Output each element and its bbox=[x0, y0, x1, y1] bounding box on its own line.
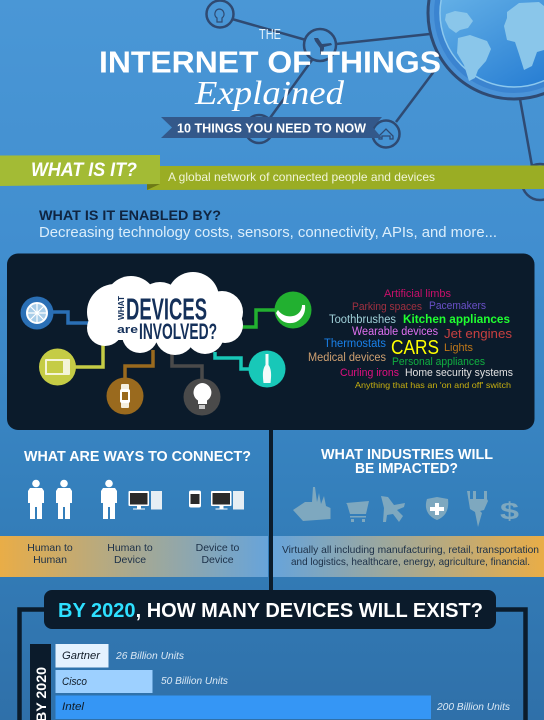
chart heading: BY 2020, HOW MANY DEVICES WILL EXIST? bbox=[58, 600, 483, 622]
icon: light bulb bbox=[184, 378, 220, 416]
icon: toothbrush bbox=[248, 350, 286, 388]
title bbox=[99, 26, 441, 112]
industries heading: BE IMPACTED? bbox=[355, 461, 458, 477]
cloud heading: involved: INVOLVED? bbox=[139, 319, 217, 344]
bar chart bbox=[30, 644, 510, 720]
globe continents bbox=[445, 2, 544, 81]
subtitle ribbon bbox=[161, 117, 382, 138]
word cloud: Jet engines bbox=[444, 326, 513, 341]
panel: by 2020 chart bbox=[20, 590, 526, 720]
band heading: WHAT IS IT? bbox=[31, 159, 137, 181]
axis label bbox=[30, 644, 51, 720]
connect labels: Device bbox=[201, 554, 234, 566]
connect heading: WHAT ARE WAYS TO CONNECT? bbox=[24, 449, 251, 465]
device connectors bbox=[53, 310, 276, 379]
word cloud: Kitchen appliances bbox=[403, 312, 510, 326]
center stem connector bbox=[269, 430, 273, 592]
panel: devices bbox=[7, 254, 534, 430]
title line: Explained: Explained bbox=[194, 75, 345, 112]
icon: shield bbox=[426, 497, 448, 520]
enabled by text: Decreasing technology costs, sensors, connectivity, APIs, and more... bbox=[39, 224, 497, 241]
title line: Internet of Things: INTERNET OF THINGS bbox=[99, 46, 441, 80]
word cloud: Curling irons bbox=[340, 367, 399, 379]
word cloud: Personal appliances bbox=[392, 356, 485, 368]
industry icons bbox=[293, 487, 520, 527]
bar: Gartner: Gartner bbox=[62, 650, 101, 662]
icon: house bbox=[379, 129, 393, 139]
bar: Cisco: 50 Billion Units bbox=[161, 676, 228, 687]
icon: shopping cart bbox=[346, 501, 369, 522]
connect labels: Human bbox=[33, 554, 67, 566]
what is it band bbox=[0, 155, 544, 190]
connect band bbox=[0, 536, 268, 577]
word cloud: Pacemakers bbox=[429, 300, 486, 312]
icon: plane bbox=[314, 38, 332, 55]
network illustration bbox=[206, 0, 544, 200]
icon: fitness band bbox=[274, 292, 312, 328]
icons: human to device bbox=[101, 480, 162, 519]
word cloud: Wearable devices bbox=[352, 326, 438, 338]
cloud heading: devices: DEVICES bbox=[126, 292, 207, 326]
industries heading: WHAT INDUSTRIES WILL bbox=[321, 447, 493, 463]
bar: Intel bbox=[56, 696, 510, 719]
industries text bbox=[282, 544, 539, 568]
icon: light bulb bbox=[215, 9, 224, 22]
industries text: Virtually all including manufacturing, retail, transportation bbox=[282, 544, 539, 556]
industries band bbox=[273, 536, 544, 577]
connect labels bbox=[27, 542, 240, 566]
connect labels: Device to bbox=[196, 542, 240, 554]
word cloud: Anything that has an 'on and off' switch bbox=[355, 380, 511, 390]
icon: dollar sign: $ bbox=[500, 498, 520, 525]
word cloud: Lights bbox=[444, 342, 473, 354]
title line: The: THE bbox=[259, 26, 281, 43]
word cloud: Parking spaces bbox=[352, 301, 422, 313]
bar: Gartner: 26 Billion Units bbox=[115, 651, 184, 662]
icons: human to human bbox=[28, 480, 72, 519]
word cloud: Home security systems bbox=[405, 367, 513, 379]
word cloud: CARS bbox=[391, 337, 439, 359]
icons: device to device bbox=[189, 490, 244, 510]
connect labels: Human to bbox=[27, 542, 73, 554]
word cloud: Toothbrushes bbox=[329, 314, 396, 326]
subtitle text: 10 THINGS YOU NEED TO NOW bbox=[177, 122, 366, 136]
band description: A global network of connected people and devices bbox=[168, 170, 435, 184]
icon: wheel bbox=[20, 296, 54, 330]
cloud heading: what: WHAT bbox=[117, 296, 126, 320]
icon: smartwatch bbox=[106, 378, 144, 414]
word cloud: Thermostats bbox=[324, 338, 386, 350]
icon: factory bbox=[293, 487, 330, 521]
bar: Intel: Intel bbox=[62, 701, 85, 713]
industries text: and logistics, healthcare, energy, agriculture, financial. bbox=[291, 556, 530, 568]
icon: shield cross bbox=[430, 503, 444, 515]
icon: microwave bbox=[39, 348, 76, 386]
chart heading box bbox=[44, 590, 496, 629]
word cloud: Medical devices bbox=[308, 352, 386, 364]
cloud heading: are: are bbox=[117, 324, 138, 336]
connect labels: Human to bbox=[107, 542, 153, 554]
enabled by heading: WHAT IS IT ENABLED BY? bbox=[39, 207, 221, 223]
panel: industries bbox=[273, 447, 544, 577]
cloud bbox=[87, 272, 243, 355]
connect labels: Device bbox=[114, 554, 146, 566]
bar: Cisco: Cisco bbox=[62, 676, 87, 688]
icon: plane bbox=[381, 496, 405, 522]
panel: ways to connect bbox=[0, 449, 268, 577]
word cloud bbox=[308, 288, 513, 390]
bar: Cisco bbox=[56, 670, 228, 693]
icon: power plug bbox=[467, 491, 488, 527]
word cloud: Artificial limbs bbox=[384, 288, 451, 300]
bar: Gartner bbox=[56, 644, 184, 668]
bar: Intel: 200 Billion Units bbox=[436, 702, 510, 713]
industries heading bbox=[321, 447, 493, 477]
globe bbox=[428, 0, 544, 99]
